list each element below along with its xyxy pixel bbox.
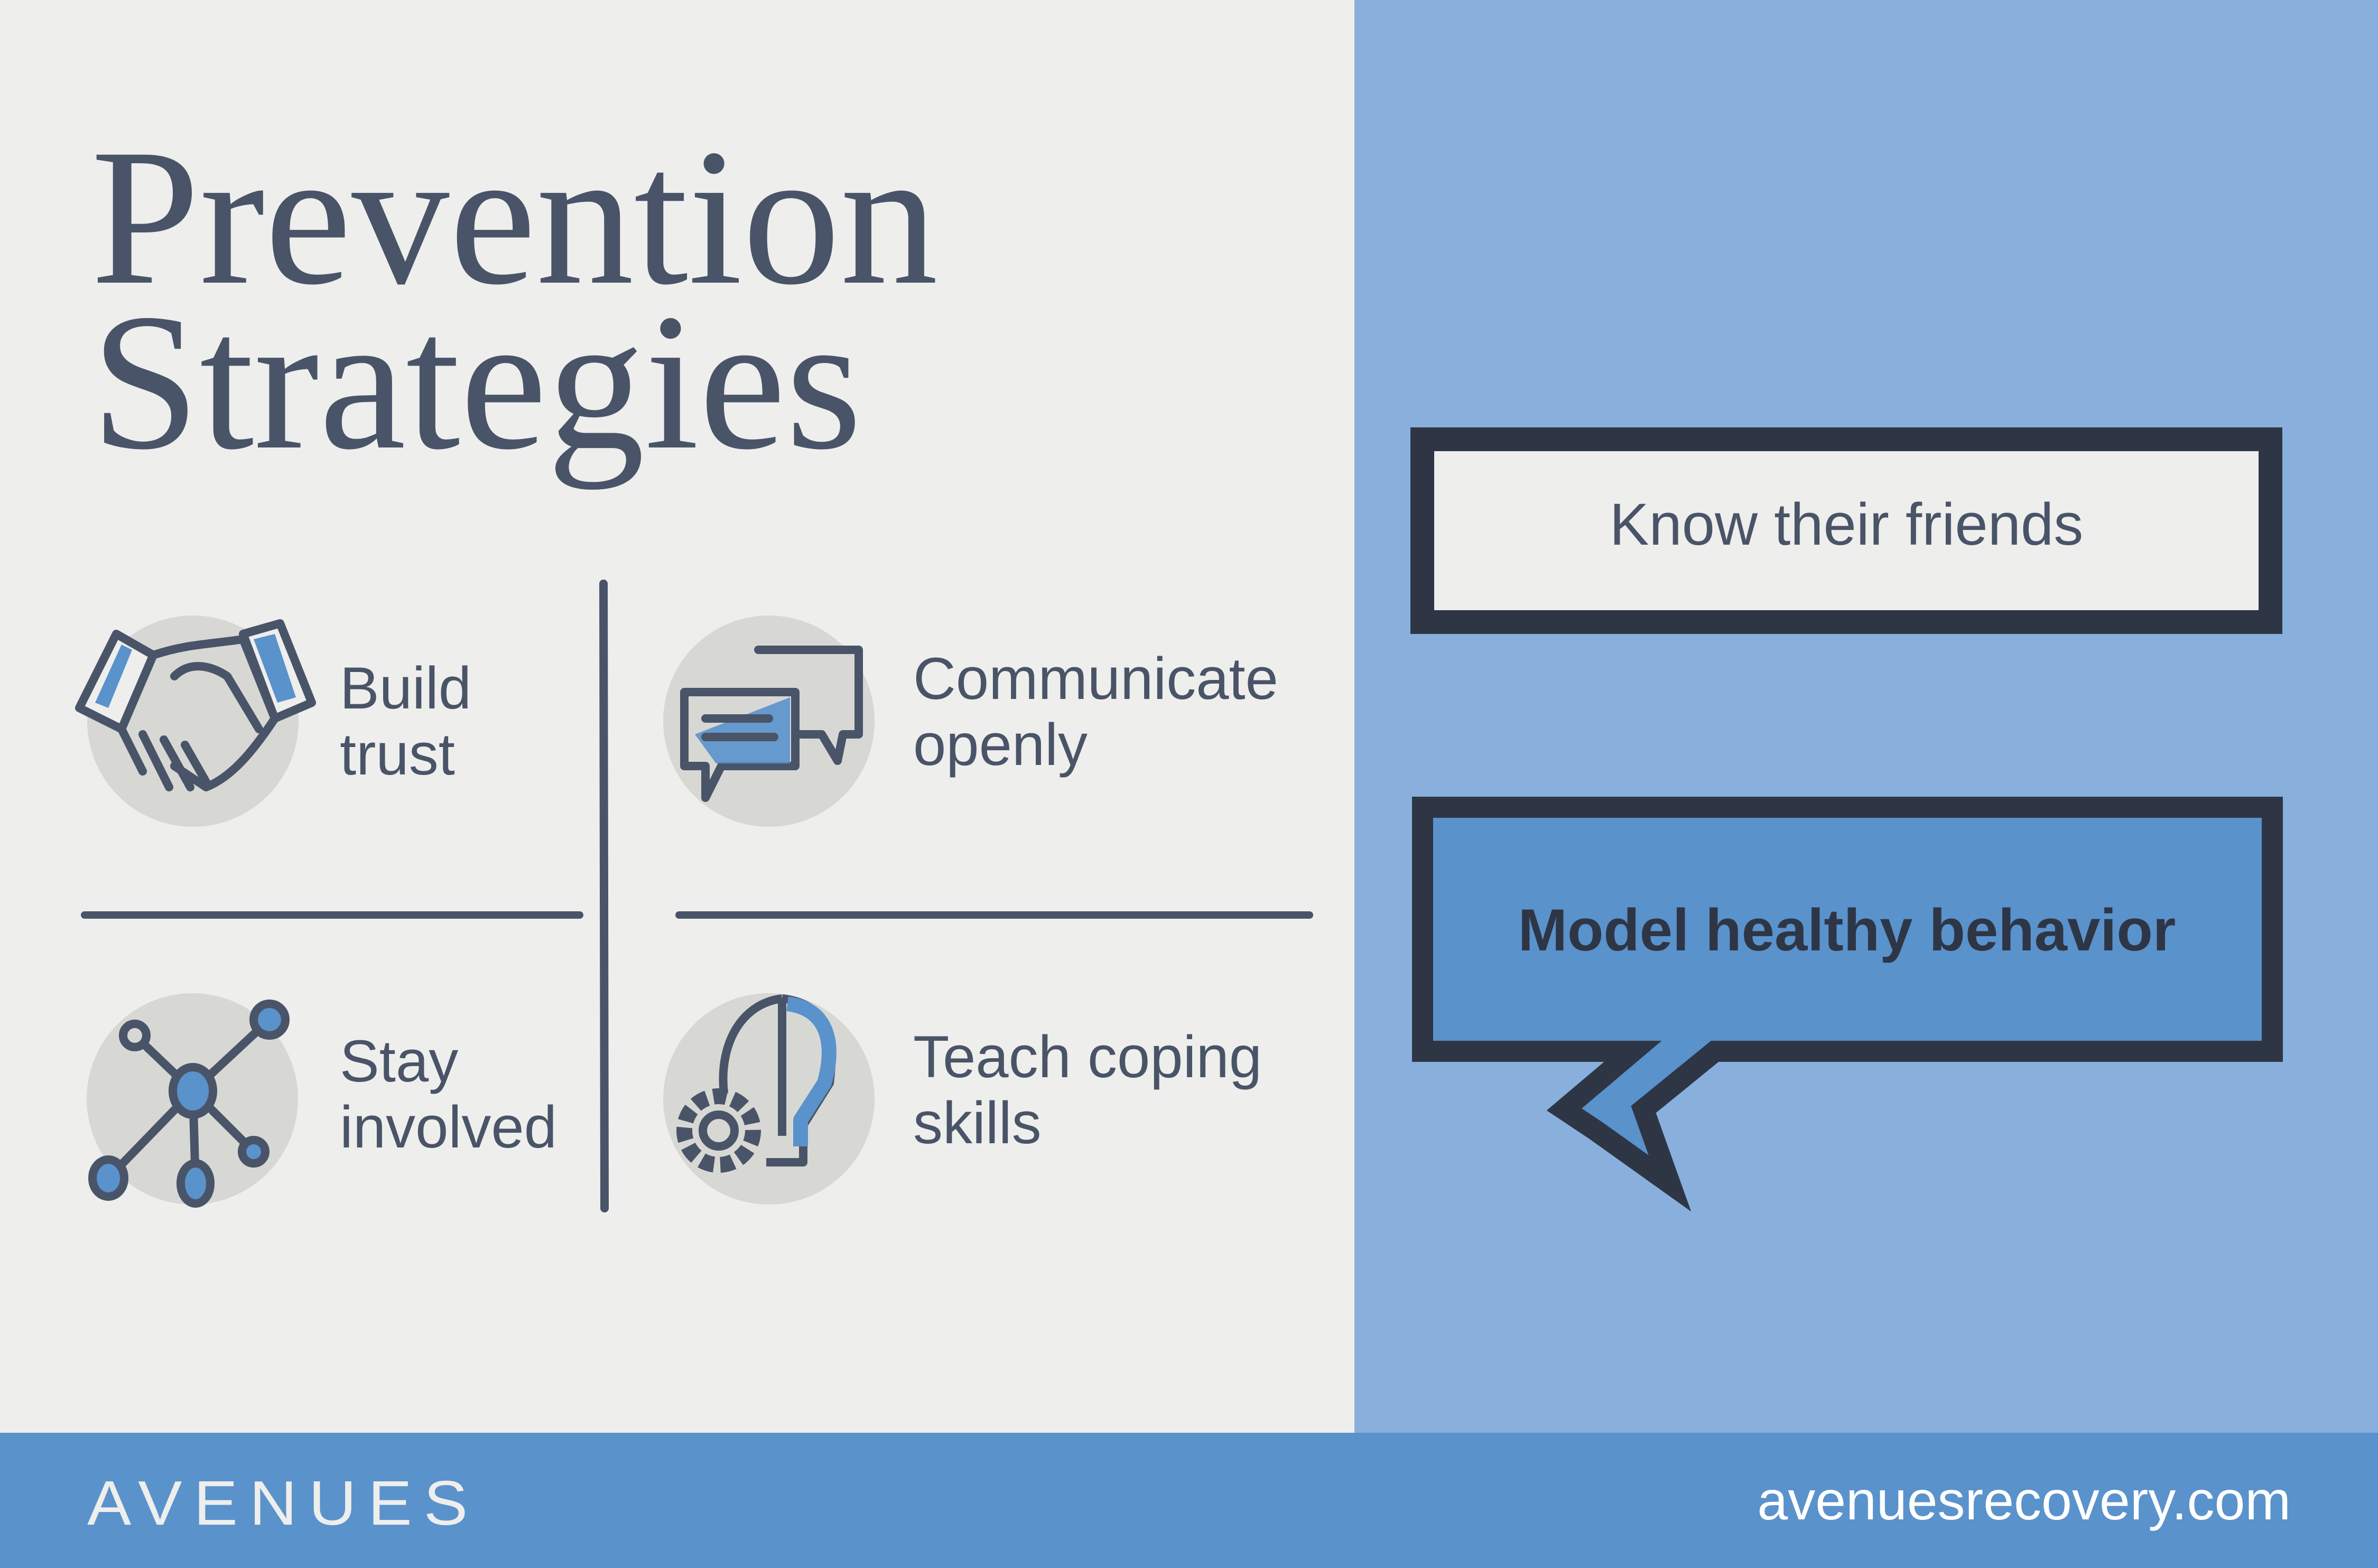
text: model healthy behavior: Model healthy behavior xyxy=(1518,897,2176,963)
icon: head with gear xyxy=(663,993,875,1205)
text: Stay involved: Stay xyxy=(340,1028,458,1094)
logo: AVENUES: AVENUES xyxy=(87,1468,479,1538)
footer xyxy=(0,1433,2378,1568)
text: Teach coping skills xyxy=(913,1024,1262,1156)
callout: know their friends xyxy=(1410,427,2282,634)
grid lines xyxy=(81,580,1313,1212)
panel: left background xyxy=(0,0,1354,1433)
callout: know their friends: Know their friends xyxy=(1610,491,2083,557)
text: Build trust: trust xyxy=(340,721,455,787)
text: Teach coping skills: skills xyxy=(913,1090,1042,1156)
callout: model healthy behavior xyxy=(1412,797,2283,1212)
text: Build trust xyxy=(340,655,471,787)
title: Strategies xyxy=(91,274,862,490)
text: Teach coping skills: Teach coping xyxy=(913,1024,1262,1090)
text: Communicate openly: openly xyxy=(913,712,1088,778)
title xyxy=(91,109,938,490)
panel: right background xyxy=(1354,0,2378,1433)
text: Stay involved xyxy=(340,1028,557,1160)
icon: chat bubbles xyxy=(663,615,875,827)
text: Communicate openly xyxy=(913,646,1278,778)
icon: network xyxy=(87,993,298,1208)
text: Build trust: Build xyxy=(340,655,471,721)
text: Communicate openly: Communicate xyxy=(913,646,1278,712)
icon: handshake xyxy=(75,615,316,827)
text: Stay involved: involved xyxy=(340,1094,557,1160)
footer url: avenuesrecovery.com xyxy=(1757,1470,2291,1532)
title: Prevention xyxy=(91,109,938,325)
